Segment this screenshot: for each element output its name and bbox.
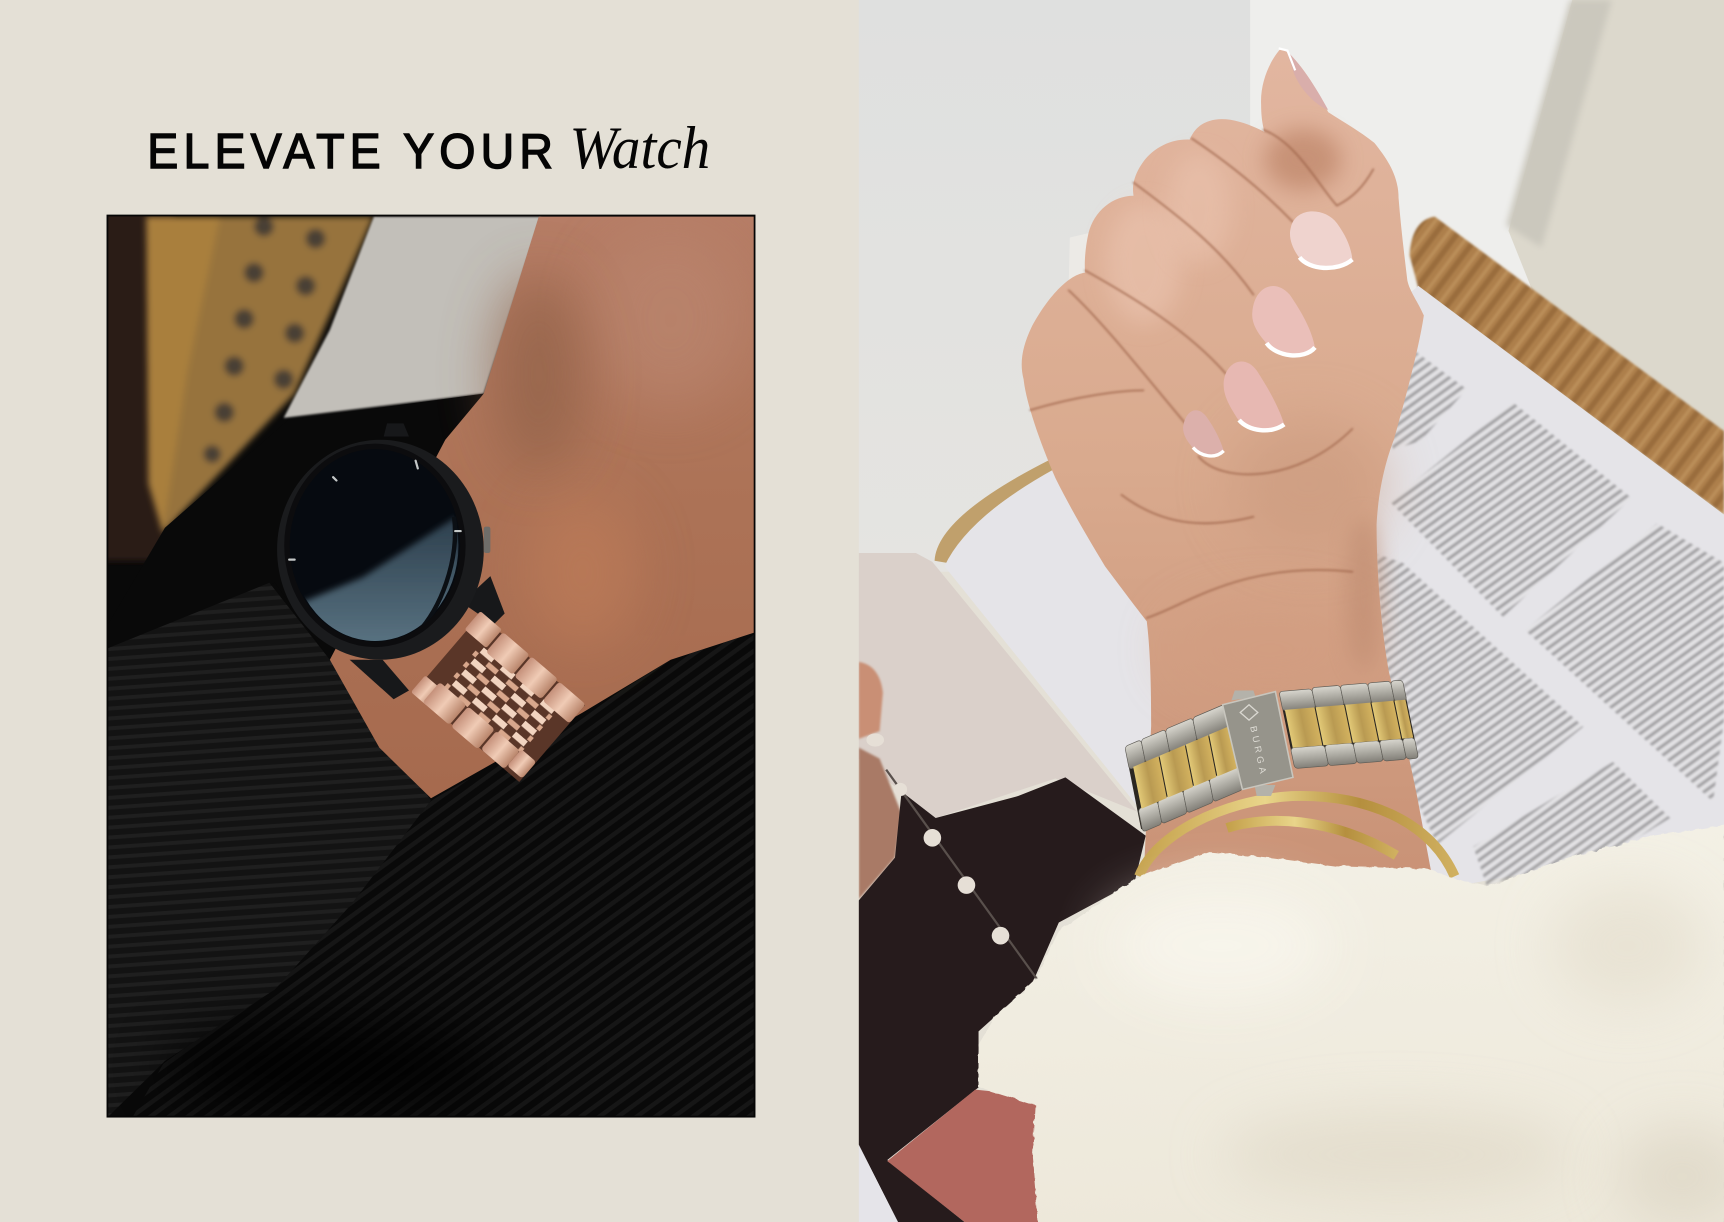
watch lugs <box>350 423 505 699</box>
magazine left page <box>859 553 1137 818</box>
bottom sweater shadow <box>165 1023 495 1111</box>
printed text blocks (blurred) <box>1377 350 1724 885</box>
sleeve left <box>107 583 431 1118</box>
pearl necklace <box>866 733 1039 982</box>
black sweater upper <box>144 394 484 563</box>
nails <box>1183 48 1352 457</box>
photo border <box>107 216 755 1117</box>
cushion <box>284 217 541 418</box>
crown <box>484 527 490 553</box>
page corner <box>859 1145 898 1222</box>
finger creases <box>1030 130 1373 618</box>
chair fabric <box>1508 0 1724 451</box>
left cream panel <box>0 0 859 1222</box>
rose gold band <box>411 611 587 784</box>
linen sleeve <box>979 825 1724 1222</box>
watch case <box>277 440 484 660</box>
title: Watch <box>570 115 710 182</box>
wooden tray left <box>935 460 1056 563</box>
title <box>147 115 710 182</box>
cane chair <box>146 217 374 533</box>
bangles <box>1139 796 1455 876</box>
light panel <box>1250 0 1572 292</box>
photo: hand with two-tone bracelet <box>859 0 1724 1222</box>
portrait pink garment <box>887 1090 1039 1222</box>
bracelet right links <box>1279 680 1419 769</box>
portrait dark top <box>859 777 1146 1222</box>
clasp <box>1223 690 1293 796</box>
hour ticks <box>289 461 461 560</box>
brand logo <box>1240 705 1258 720</box>
bracelet left links <box>1125 704 1243 833</box>
clasp: BURGA <box>1248 725 1269 778</box>
sleeve lower right <box>132 632 755 1118</box>
wooden tray right <box>1410 217 1724 515</box>
watch face <box>284 444 466 647</box>
dark background <box>108 216 173 563</box>
title: ELEVATE YOUR <box>147 125 553 180</box>
wall <box>859 0 1255 572</box>
chair shadow edge <box>1506 0 1612 247</box>
sleeve folds <box>1110 885 1724 1222</box>
photo: smartwatch on rose gold band <box>99 209 755 1118</box>
portrait ear <box>859 662 883 739</box>
portrait neck <box>859 748 902 899</box>
white book page <box>944 286 1724 885</box>
hand and forearm <box>1022 48 1433 880</box>
forearm skin <box>330 217 755 798</box>
ring <box>1069 234 1088 280</box>
hand shading <box>1105 129 1385 693</box>
skin shading <box>495 231 748 649</box>
